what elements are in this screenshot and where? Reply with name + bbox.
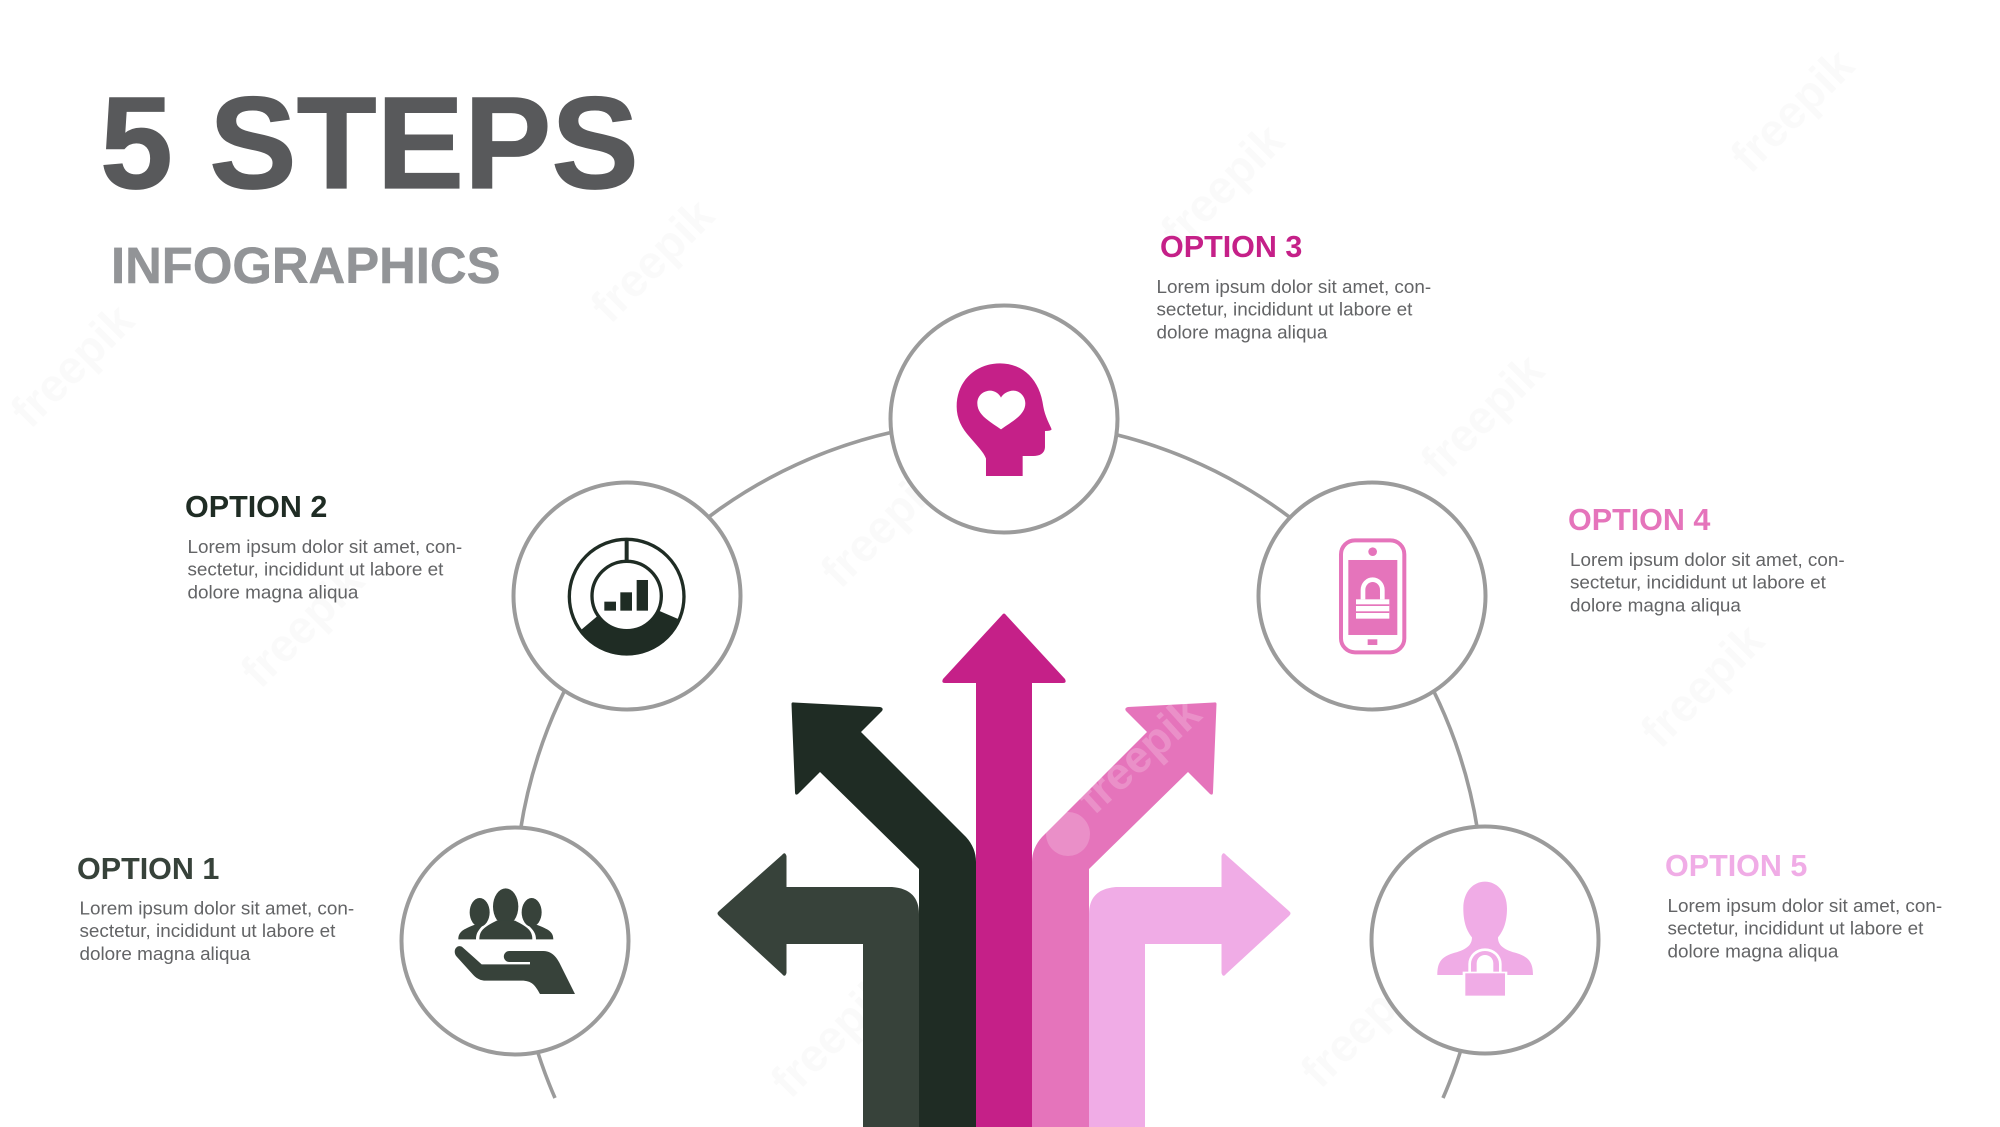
text block: option 1: sectetur, incididunt ut labore et xyxy=(80,920,336,941)
icon: person with lock xyxy=(1437,882,1533,996)
text block: option 3: OPTION 3 xyxy=(1160,230,1302,264)
text block: option 2: dolore magna aliqua xyxy=(188,581,359,602)
watermark on pink arrow: freepik xyxy=(1067,686,1211,823)
text block: option 3: Lorem ipsum dolor sit amet, con- xyxy=(1156,276,1431,297)
node: option 1 xyxy=(402,828,628,1054)
watermark: freepik xyxy=(0,293,144,437)
text block: option 1: OPTION 1 xyxy=(77,852,219,886)
watermark: freepik xyxy=(230,553,374,697)
text block: option 3: dolore magna aliqua xyxy=(1156,321,1328,342)
title: 5 STEPS xyxy=(100,69,639,216)
subtitle: INFOGRAPHICS xyxy=(111,237,500,294)
text block: option 2: Lorem ipsum dolor sit amet, con- xyxy=(188,536,462,557)
icon: phone with lock xyxy=(1341,540,1404,652)
text block: option 4: OPTION 4 xyxy=(1568,503,1710,537)
text block: option 5: OPTION 5 xyxy=(1665,849,1807,883)
text block: option 4: dolore magna aliqua xyxy=(1570,594,1741,615)
text block: option 5: Lorem ipsum dolor sit amet, con- xyxy=(1668,895,1942,916)
node: option 3 xyxy=(890,306,1118,532)
watermark: freepik xyxy=(1720,38,1864,182)
watermark: freepik xyxy=(1630,613,1774,757)
text block: option 4 xyxy=(1568,503,1845,615)
watermark: freepik xyxy=(580,188,724,332)
text block: option 2 xyxy=(185,490,462,602)
icon: head with heart xyxy=(957,363,1052,476)
text block: option 3 xyxy=(1156,230,1431,342)
arrow: option 5 light pink right xyxy=(1089,853,1290,1127)
text block: option 1: dolore magna aliqua xyxy=(80,943,251,964)
arrows group xyxy=(718,614,1290,1127)
text block: option 2: sectetur, incididunt ut labore et xyxy=(188,559,444,580)
icon: people on hand xyxy=(455,888,575,994)
text block: option 5: dolore magna aliqua xyxy=(1668,940,1839,961)
text block: option 5: sectetur, incididunt ut labore et xyxy=(1668,918,1924,939)
connecting arc xyxy=(515,420,1483,1098)
watermark: freepik xyxy=(760,963,904,1107)
text block: option 1: Lorem ipsum dolor sit amet, con- xyxy=(80,898,354,918)
watermark: freepik xyxy=(810,453,954,597)
arrow: option 4 pink up-right xyxy=(1032,702,1216,1127)
text block: option 3: sectetur, incididunt ut labore et xyxy=(1156,299,1413,320)
arrow: option 2 dark up-left xyxy=(792,702,976,1127)
arrow: option 3 magenta up xyxy=(942,614,1066,1127)
watermark: freepik xyxy=(1290,953,1434,1097)
text block: option 4: sectetur, incididunt ut labore et xyxy=(1570,572,1827,593)
node: option 5 xyxy=(1372,826,1598,1054)
watermark: freepik xyxy=(1150,113,1294,257)
watermark: freepik xyxy=(1410,343,1554,487)
arrow: option 1 left xyxy=(718,853,919,1127)
node: option 4 xyxy=(1258,482,1486,710)
text block: option 4: Lorem ipsum dolor sit amet, con- xyxy=(1570,549,1845,570)
text block: option 5 xyxy=(1665,849,1942,961)
text block: option 2: OPTION 2 xyxy=(185,490,327,524)
text block: option 1 xyxy=(77,852,354,964)
node: option 2 xyxy=(514,482,740,710)
icon: dashboard gauge xyxy=(569,539,684,655)
